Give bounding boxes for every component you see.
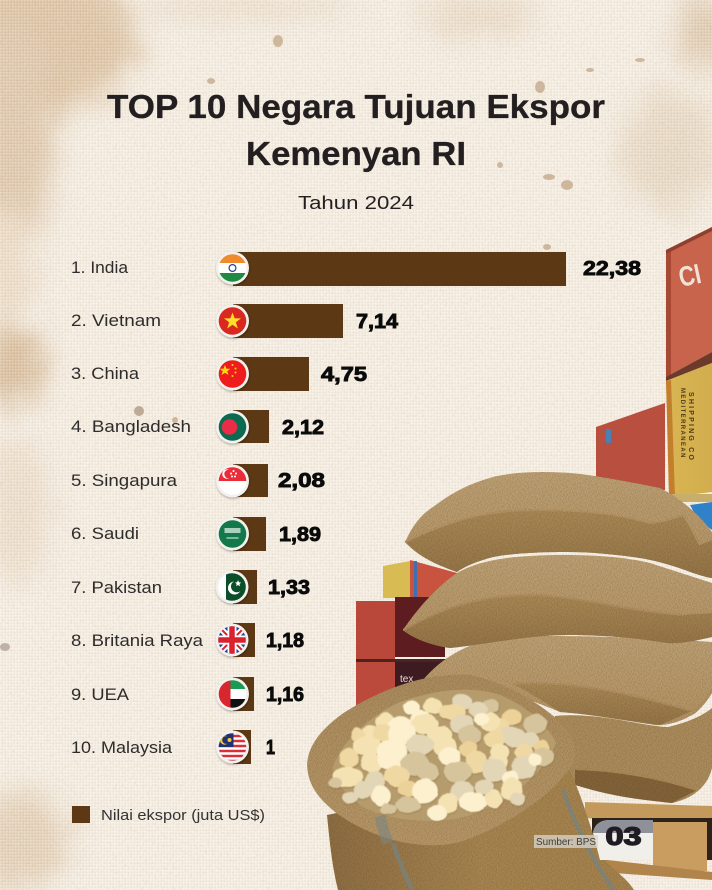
row 8: Britania Raya: 8. Britania Raya — [71, 632, 204, 650]
sack 2 — [403, 555, 712, 648]
shipping containers: right stack: CI — [676, 258, 704, 293]
row 5: Singapura: 2,08 — [278, 470, 325, 492]
shipping containers: right stack: MEDITERRANEAN — [679, 388, 685, 459]
row 7: Pakistan: 7. Pakistan — [71, 579, 162, 597]
sack opening shadow — [333, 690, 556, 821]
row 6: Saudi: 6. Saudi — [71, 525, 139, 543]
open sack filled with frankincense resin — [307, 675, 634, 890]
sack stripes — [393, 790, 614, 890]
row 3: China: 4,75 — [321, 364, 367, 386]
row 10: Malaysia — [71, 730, 275, 764]
row 7: Pakistan — [71, 570, 310, 604]
pallet — [585, 802, 712, 880]
stacked burlap sacks — [403, 472, 712, 803]
title — [107, 88, 605, 172]
sack 3 — [423, 636, 712, 725]
row 1: India — [71, 252, 641, 286]
bar chart: export value — [71, 252, 641, 764]
folded stripe on rim — [380, 816, 388, 843]
row 2: Vietnam: 2. Vietnam — [71, 312, 161, 330]
row 10: Malaysia: 1 — [266, 737, 275, 759]
row 3: China: 3. China — [71, 365, 140, 383]
page number badge: 03 — [606, 823, 642, 851]
source note: Sumber: BPS — [536, 837, 596, 848]
resin chunks — [328, 694, 554, 821]
row 4: Bangladesh — [71, 410, 324, 444]
shipping containers: right stack: SHIPPING CO — [687, 392, 694, 462]
row 2: Vietnam — [71, 304, 399, 338]
row 1: India: 1. India — [71, 259, 129, 277]
row 8: Britania Raya: 1,18 — [266, 630, 304, 652]
subtitle: Tahun 2024 — [298, 193, 414, 213]
page number badge — [593, 820, 653, 860]
row 1: India: 22,38 — [583, 258, 641, 280]
row 6: Saudi — [71, 517, 321, 551]
row 10: Malaysia: 10. Malaysia — [71, 739, 173, 757]
row 5: Singapura: 5. Singapura — [71, 472, 178, 490]
sack body — [327, 765, 634, 890]
row 2: Vietnam: 7,14 — [356, 311, 399, 333]
row 4: Bangladesh: 2,12 — [282, 417, 324, 439]
sack rim — [307, 675, 575, 845]
legend: Nilai ekspor (juta US$) — [101, 807, 265, 824]
row 5: Singapura — [71, 464, 325, 498]
row 4: Bangladesh: 4. Bangladesh — [71, 418, 191, 436]
row 9: UEA — [71, 677, 304, 711]
sack 1 — [405, 472, 712, 578]
title: Kemenyan RI — [246, 135, 466, 172]
row 3: China — [71, 357, 367, 391]
shipping containers: left stack: tex — [400, 674, 413, 685]
row 7: Pakistan: 1,33 — [268, 577, 310, 599]
row 9: UEA: 9. UEA — [71, 686, 129, 704]
row 8: Britania Raya — [71, 623, 304, 657]
title: TOP 10 Negara Tujuan Ekspor — [107, 88, 605, 125]
shipping containers: left stack — [356, 560, 457, 708]
paper specks — [0, 35, 645, 651]
shipping containers: right stack — [596, 227, 712, 530]
sack 4 — [555, 708, 712, 803]
row 6: Saudi: 1,89 — [279, 524, 321, 546]
row 9: UEA: 1,16 — [266, 684, 304, 706]
